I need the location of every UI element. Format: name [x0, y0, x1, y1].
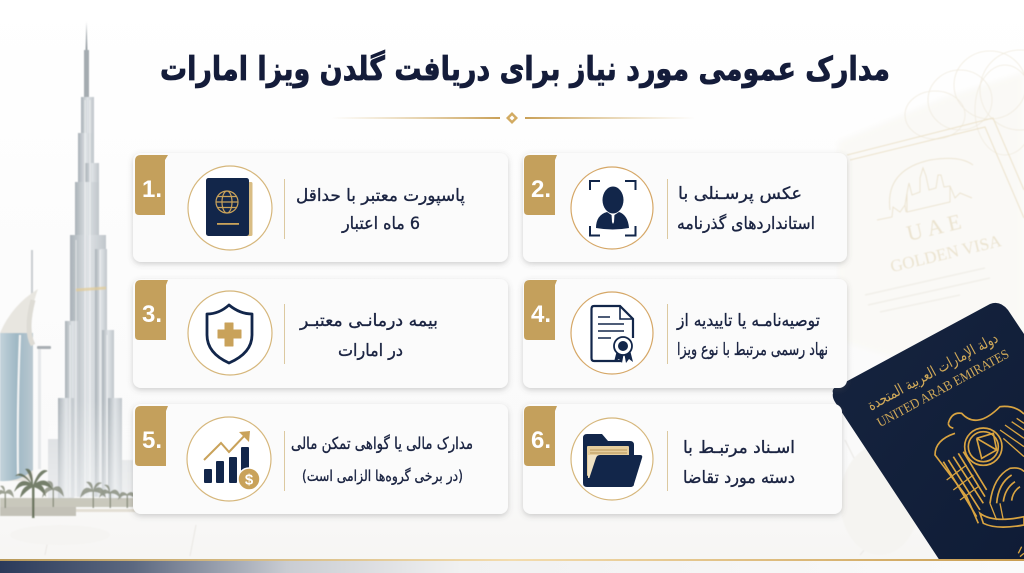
text 6 [683, 438, 795, 488]
divider 6 [667, 431, 668, 491]
icon: portrait frame [571, 167, 653, 249]
text 1: 6 ماه اعتبار [341, 214, 420, 234]
panel: card 3 insurance [133, 279, 508, 388]
panel: card 1 passport [133, 153, 508, 262]
number badge 5: 5. [142, 427, 162, 454]
icon: certificate document [571, 292, 653, 374]
text 3: در امارات [338, 341, 403, 361]
text 4: نهاد رسمی مرتبط با نوع ویزا [677, 340, 828, 360]
divider 1 [284, 179, 285, 239]
text 3: بیمه درمانـی معتبـر [299, 311, 438, 331]
divider 5 [284, 431, 285, 491]
passport eagle emblem [935, 406, 1024, 557]
panel: card 5 financial documents [133, 404, 508, 514]
text 5 [291, 434, 473, 485]
divider 4 [667, 304, 668, 364]
document frame [847, 118, 1024, 218]
number badge 1: 1. [142, 176, 162, 203]
divider 3 [284, 304, 285, 364]
bottom band [0, 559, 1024, 573]
document title [888, 208, 1004, 276]
Burj Al Arab hotel [0, 250, 51, 481]
number badge 2: 2. [531, 176, 551, 203]
text 5: مدارک مالی یا گواهی تمکن مالی [291, 434, 473, 454]
background: Dubai skyline [0, 22, 138, 518]
number badge 3: 3. [142, 301, 162, 328]
icon: passport [188, 166, 272, 250]
text 6: دسته مورد تقاضا [683, 468, 795, 488]
number badge 1 [135, 155, 168, 215]
text 5: (در برخی گروه‌ها الزامی است) [302, 467, 463, 485]
marble floor [10, 440, 920, 556]
passport english title: UNITED ARAB EMIRATES [874, 346, 1011, 430]
panel: card 6 related documents [523, 404, 842, 514]
panel: card 4 recommendation letter [523, 279, 847, 388]
title ornament [332, 112, 695, 124]
divider 2 [667, 179, 668, 239]
number badge 6 [524, 406, 557, 466]
number badge 2 [524, 155, 557, 215]
number badge 4: 4. [531, 301, 551, 328]
UAE passport [833, 303, 1024, 573]
background: golden visa document [838, 50, 1024, 360]
text 1: پاسپورت معتبر با حداقل [296, 186, 465, 206]
number badge 3 [135, 280, 168, 340]
number badge 4 [524, 280, 557, 340]
text 4 [676, 311, 828, 360]
guilloche pattern [905, 50, 1024, 155]
text 3 [299, 311, 438, 361]
text 1 [296, 186, 465, 234]
panel: card 2 photo [523, 153, 847, 262]
icon: medical shield [188, 291, 272, 375]
document emblem [877, 158, 973, 220]
Burj Khalifa tower [48, 22, 138, 500]
icon: open folder [571, 418, 653, 500]
number badge 5 [135, 406, 168, 466]
icon: financial growth chart [187, 417, 271, 501]
text 4: توصیه‌نامـه یا تاییدیه از [676, 311, 820, 331]
text 2 [677, 184, 815, 234]
text 2: استانداردهای گذرنامه [677, 213, 815, 234]
text 6: اسـناد مرتبـط با [683, 438, 795, 458]
number badge 6: 6. [531, 427, 551, 454]
document title: UAE [904, 208, 968, 246]
text 2: عکس پرسـنلی با [678, 184, 802, 204]
icon: financial growth chart: $ [245, 472, 254, 488]
document title: GOLDEN VISA [888, 231, 1004, 276]
palm trees and ground [0, 469, 136, 518]
